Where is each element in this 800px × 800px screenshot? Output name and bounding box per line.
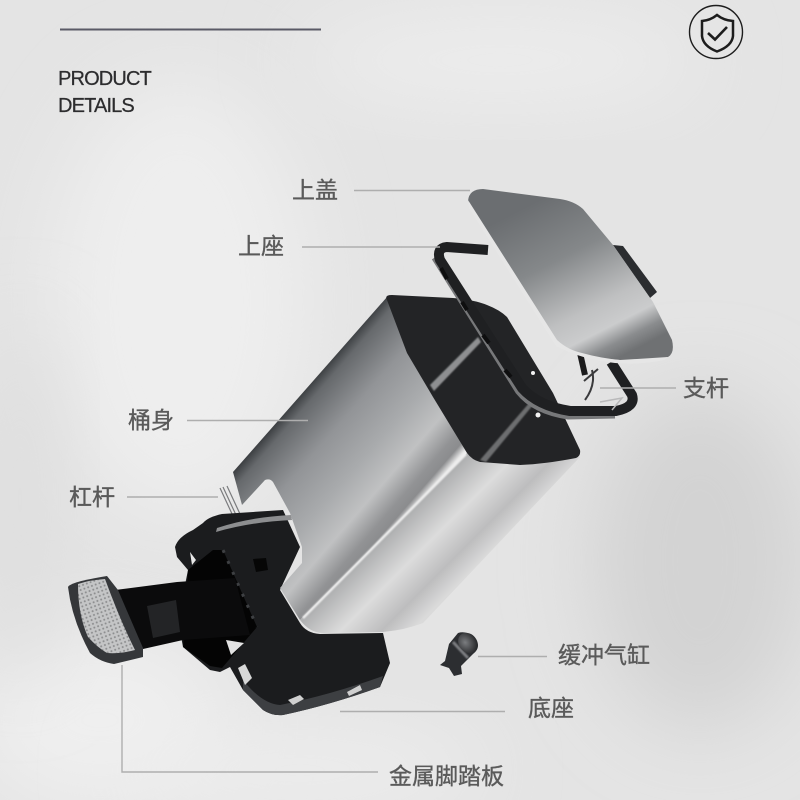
labels: 杠杆 xyxy=(69,484,115,510)
labels: 支杆 xyxy=(683,375,729,401)
heading: product details: PRODUCT xyxy=(58,68,152,90)
part: base xyxy=(175,510,390,715)
top rule xyxy=(60,28,321,30)
heading: product details: DETAILS xyxy=(58,95,134,117)
labels: 上座 xyxy=(238,233,284,259)
part: metal foot pedal xyxy=(68,576,250,664)
icon: shield check badge xyxy=(690,6,742,58)
part: lever rods xyxy=(220,486,240,516)
labels: 上盖 xyxy=(292,177,338,203)
labels: 缓冲气缸 xyxy=(558,642,650,668)
part: upper seat frame xyxy=(434,247,633,418)
label lines xyxy=(122,190,676,772)
part: bucket body xyxy=(233,295,580,633)
labels: 金属脚踏板 xyxy=(389,763,504,789)
heading: product details xyxy=(58,68,152,117)
labels xyxy=(69,177,729,789)
labels: 底座 xyxy=(528,695,574,721)
part: lid xyxy=(468,189,673,364)
labels: 桶身 xyxy=(128,407,174,433)
part: buffer cylinder xyxy=(440,629,482,676)
